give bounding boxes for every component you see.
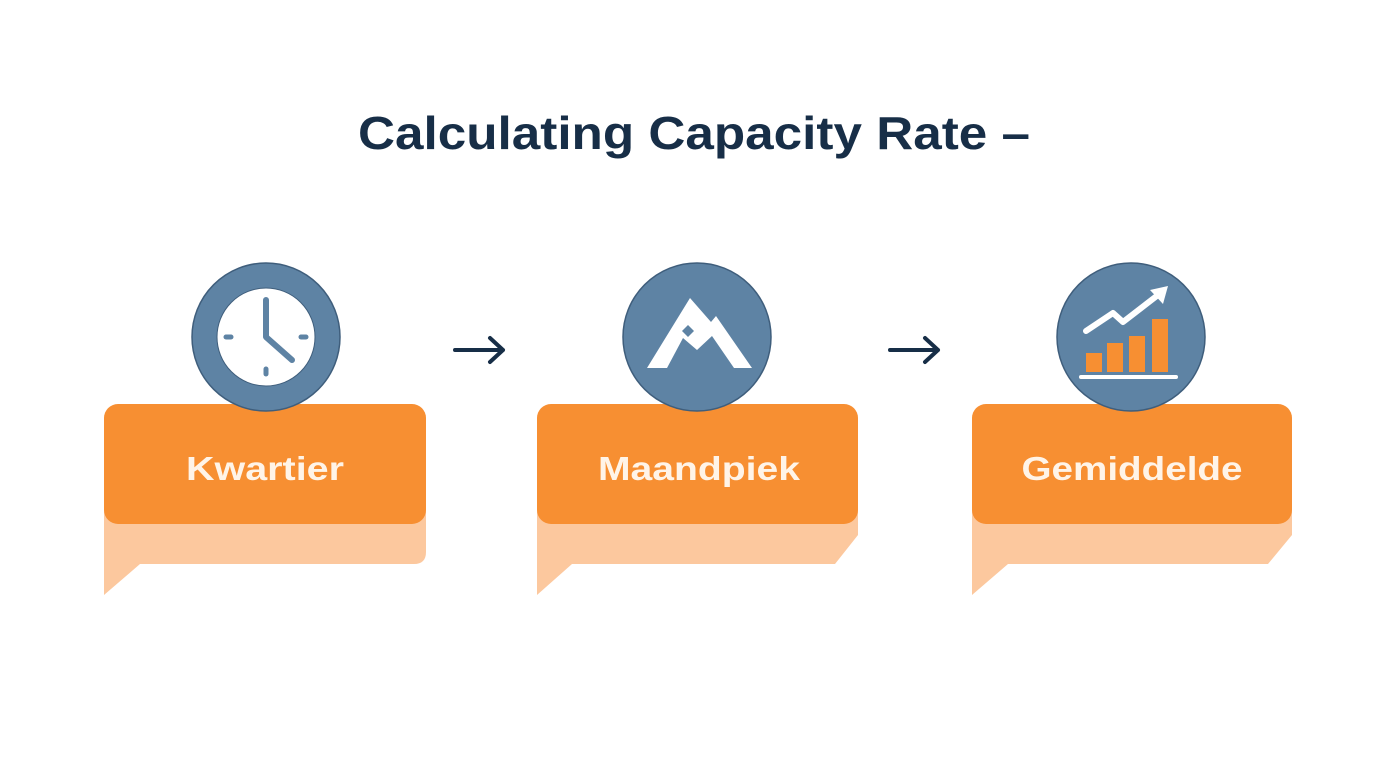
label: Kwartier [186, 450, 344, 487]
label: Gemiddelde [1022, 450, 1242, 487]
icon: clock [192, 263, 340, 411]
arrow 1 [455, 338, 503, 362]
shadow tail [972, 510, 1292, 595]
shadow tail [104, 510, 426, 595]
label: Maandpiek [598, 450, 801, 487]
box [972, 404, 1292, 524]
step 3: Gemiddelde [972, 263, 1292, 595]
box [537, 404, 858, 524]
box [104, 404, 426, 524]
title: Calculating Capacity Rate – [358, 107, 1030, 159]
icon: growth chart [1057, 263, 1205, 411]
step 2: Maandpiek [537, 263, 858, 595]
shadow tail [537, 510, 858, 595]
arrow 2 [890, 338, 938, 362]
icon: mountain [623, 263, 771, 411]
step 1: Kwartier [104, 263, 426, 595]
